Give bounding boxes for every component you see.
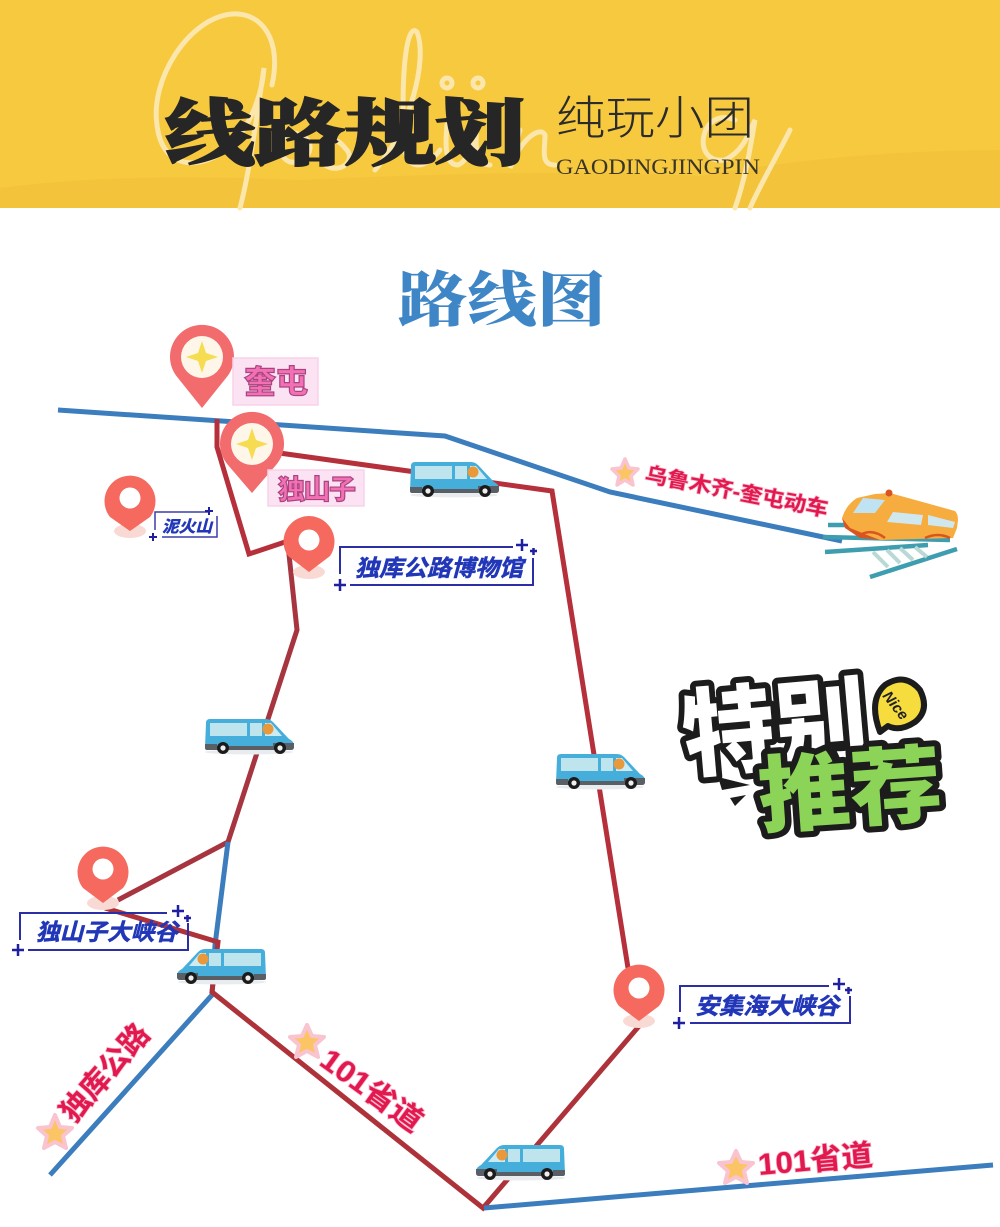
bus icon: junction <box>177 949 266 984</box>
label: Flaming Mountain <box>149 507 217 541</box>
icon: train on tracks <box>823 490 958 577</box>
red route east <box>265 451 628 968</box>
title: route planning: 线路规划 <box>165 95 525 175</box>
label: Duku road: 独库公路 <box>54 1018 157 1129</box>
label: Urumqi to Kuitun train: 乌鲁木齐-奎屯动车 <box>643 462 830 521</box>
label: Kuitun <box>233 358 318 405</box>
nice speech bubble: Nice <box>879 688 912 723</box>
red route west upper <box>217 419 288 554</box>
blue duku link <box>50 842 228 1175</box>
decorative script lettering <box>156 14 790 208</box>
english subtitle: GAODINGJINGPIN <box>556 154 760 179</box>
bus icon: top route <box>410 462 499 498</box>
blue railway line <box>58 410 842 541</box>
route map lines <box>50 410 993 1208</box>
label: Dushanzi: 独山子 <box>278 475 356 505</box>
label: Anjihai Grand Canyon: 安集海大峡谷 <box>695 993 842 1019</box>
icon: star route 101 <box>290 1025 324 1057</box>
bus icon: east route <box>556 754 645 790</box>
icon: star railway <box>612 459 638 485</box>
brown route to canyon <box>118 545 297 900</box>
label: Dushanzi Grand Canyon <box>12 905 191 956</box>
label: Anjihai Grand Canyon <box>673 978 852 1029</box>
badge text: recommend: 推荐 <box>754 718 946 851</box>
badge text: special: 特别 <box>675 643 873 798</box>
pin: Kuitun <box>170 325 234 408</box>
label: Dushanzi Grand Canyon: 独山子大峡谷 <box>36 919 181 945</box>
icon: star duku road <box>38 1115 72 1148</box>
pin: Dushanzi <box>220 412 284 493</box>
label: route 101 south: 101省道 <box>757 1139 874 1182</box>
subtitle: 纯玩小团 <box>556 82 754 148</box>
bus icon: south route <box>476 1145 565 1180</box>
header banner <box>0 0 1000 208</box>
red spur to bus <box>105 908 640 1208</box>
pin: Duku Road Museum <box>284 516 334 579</box>
label: route 101 diagonal: 101省道 <box>314 1043 429 1139</box>
badge: special recommendation <box>675 643 946 851</box>
label: Flaming Mountain: 泥火山 <box>162 518 214 536</box>
label: Kuitun: 奎屯 <box>244 364 308 400</box>
label: Dushanzi <box>268 470 364 506</box>
label: Duku Road Museum: 独库公路博物馆 <box>355 555 527 581</box>
pin: Dushanzi Grand Canyon <box>78 847 129 910</box>
blue provincial road <box>484 1165 993 1208</box>
burst marks <box>718 777 750 806</box>
nice speech bubble <box>875 680 924 732</box>
pin: Flaming Mountain <box>105 476 156 538</box>
label: Duku Road Museum <box>334 539 537 591</box>
bus icon: west route <box>205 719 294 754</box>
icon: star route 101 south <box>719 1151 753 1183</box>
pin: Anjihai Grand Canyon <box>614 965 665 1028</box>
map heading: 路线图 <box>398 268 606 334</box>
